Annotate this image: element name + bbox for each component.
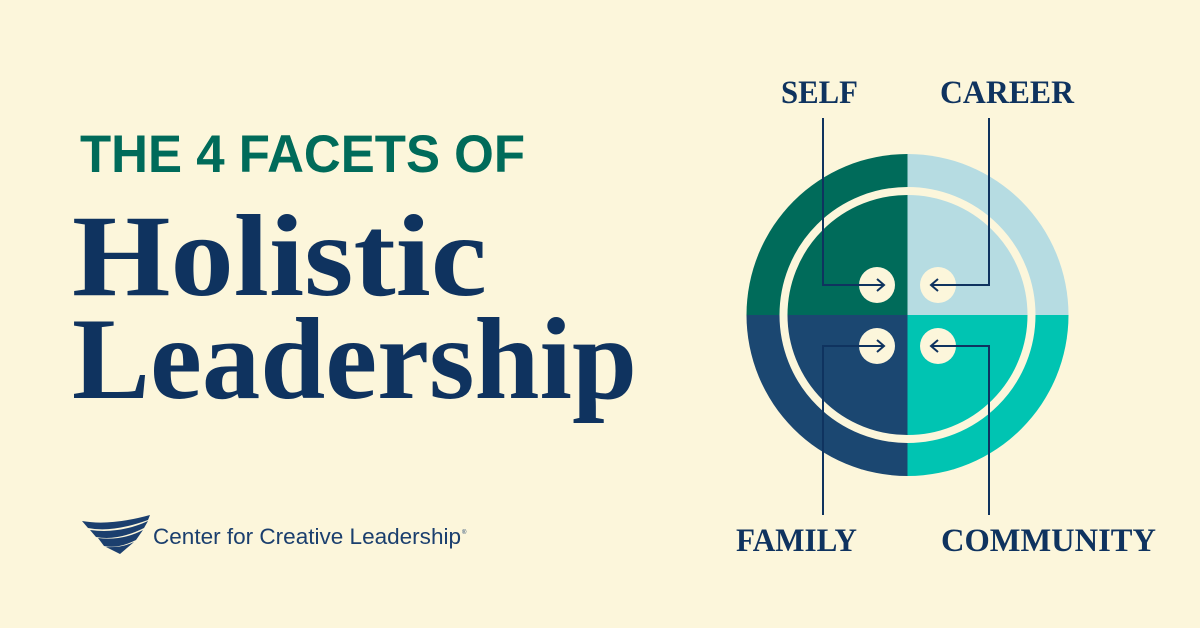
dots [859, 267, 895, 303]
logo: Center for Creative Leadership [82, 515, 467, 554]
label: CAREER: CAREER [940, 75, 1075, 111]
logo: Center for Creative Leadership: ® [462, 529, 467, 536]
chart: four facets circle [746, 154, 1068, 476]
label: SELF: SELF [781, 75, 858, 111]
logo: Center for Creative Leadership: Center for Creative Leadership [153, 524, 461, 549]
arrows [823, 118, 989, 515]
subtitle: THE 4 FACETS OF [80, 125, 525, 184]
title [72, 192, 637, 424]
title: Holistic [72, 192, 487, 321]
label: FAMILY: FAMILY [736, 523, 857, 559]
label: COMMUNITY: COMMUNITY [941, 523, 1156, 559]
icon: logo wing [82, 515, 150, 554]
title: Leadership [72, 295, 637, 424]
